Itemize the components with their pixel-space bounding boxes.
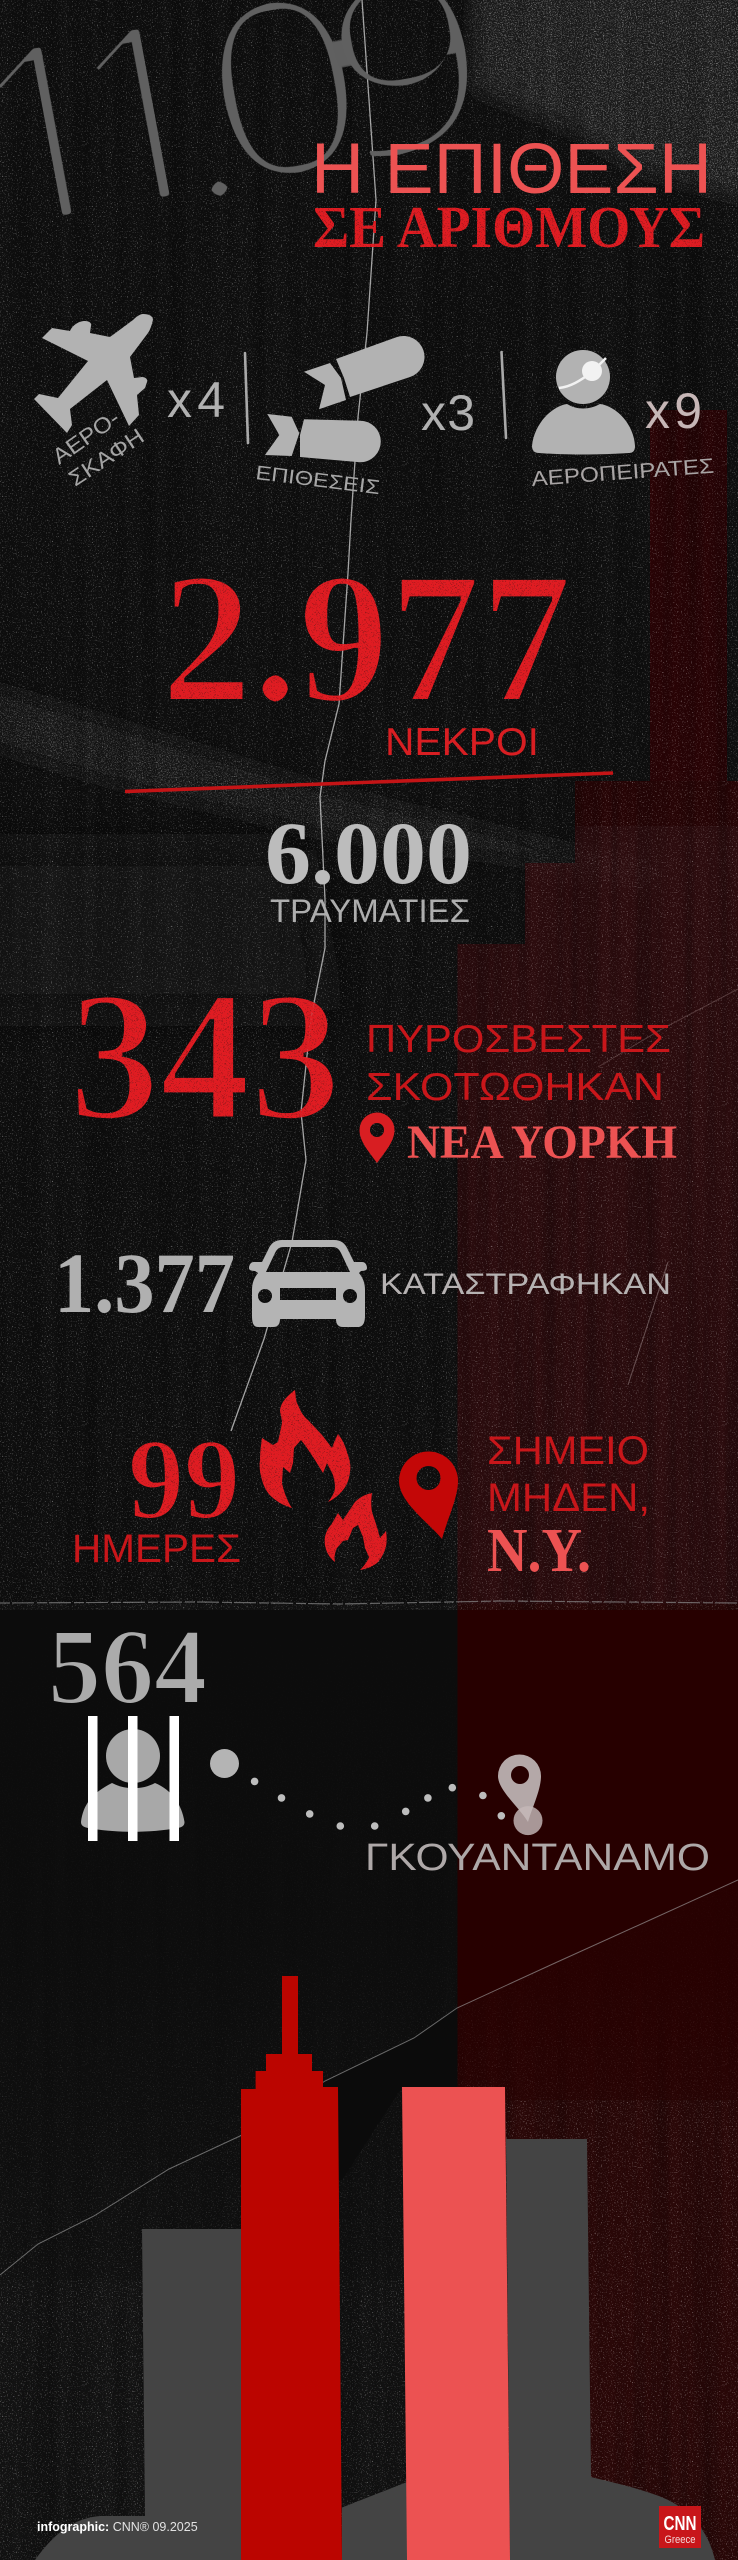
label: ΜΗΔΕΝ,: ΜΗΔΕΝ, [487,1476,650,1520]
count: x9: x9 [645,383,702,439]
label: ΝΕΑ ΥΟΡΚΗ: ΝΕΑ ΥΟΡΚΗ [407,1116,677,1169]
icon: flames [260,1390,387,1570]
grey ground and side buildings [35,2229,241,2560]
stat: 99: 99 [128,1416,240,1544]
divider [502,352,506,438]
icon: prisoner behind bars [81,1716,184,1841]
label: ΑΕΡΟΠΕΙΡΑΤΕΣ: ΑΕΡΟΠΕΙΡΑΤΕΣ [531,455,715,491]
tower: Empire State [241,1976,342,2560]
logo: CNN Greece [659,2506,701,2548]
dotted route arrow [210,1749,505,1830]
label: Ν.Υ.: Ν.Υ. [487,1517,591,1585]
credit: infographic: CNN® 09.2025 [37,2520,198,2534]
count: x4: x4 [167,372,225,428]
label: ΝΕΚΡΟΙ: ΝΕΚΡΟΙ [385,721,539,764]
label: ΑΕΡΟ-ΣΚΑΦΗ: ΑΕΡΟ- [48,405,124,469]
label: ΚΑΤΑΣΤΡΑΦΗΚΑΝ: ΚΑΤΑΣΤΡΑΦΗΚΑΝ [380,1268,671,1301]
icon: ground zero pin [399,1452,458,1539]
icon: hijacker with headset [532,350,635,454]
title: Η ΕΠΙΘΕΣΗ: Η ΕΠΙΘΕΣΗ [311,130,712,209]
label: ΓΚΟΥΑΝΤΑΝΑΜΟ: ΓΚΟΥΑΝΤΑΝΑΜΟ [365,1837,710,1879]
label: ΑΕΡΟ-ΣΚΑΦΗ: ΣΚΑΦΗ [64,423,149,491]
subtitle: ΣΕ ΑΡΙΘΜΟΥΣ: ΣΕ ΑΡΙΘΜΟΥΣ [313,194,705,260]
icon: airplane [34,314,153,433]
label: ΣΗΜΕΙΟ: ΣΗΜΕΙΟ [487,1429,649,1473]
red rule [125,773,613,792]
icon: car [249,1240,367,1327]
label: ΑΕΡΟ-ΣΚΑΦΗ [48,405,149,491]
divider [245,353,248,443]
icon: bombs [265,336,425,462]
label: ΣΚΟΤΩΘΗΚΑΝ: ΣΚΟΤΩΘΗΚΑΝ [366,1066,664,1109]
stat: 6.000: 6.000 [265,805,472,903]
label: ΠΥΡΟΣΒΕΣΤΕΣ: ΠΥΡΟΣΒΕΣΤΕΣ [366,1018,671,1061]
label: ΕΠΙΘΕΣΕΙΣ: ΕΠΙΘΕΣΕΙΣ [254,462,381,499]
tower: World Trade Center [402,2087,510,2560]
skyline [35,1976,715,2560]
count: x3: x3 [421,385,475,441]
icon: location pin [360,1112,394,1163]
logo: CNN Greece: Greece [664,2534,696,2546]
stat: 2.977: 2.977 [161,533,572,742]
label: ΤΡΑΥΜΑΤΙΕΣ: ΤΡΑΥΜΑΤΙΕΣ [270,893,470,929]
icon: Guantanamo pin [498,1754,542,1835]
logo: CNN Greece: CNN [664,2513,696,2535]
label: ΗΜΕΡΕΣ: ΗΜΕΡΕΣ [72,1527,241,1571]
stat: 343: 343 [69,954,341,1160]
stat: 564: 564 [48,1608,207,1727]
stat: 1.377: 1.377 [54,1235,235,1331]
